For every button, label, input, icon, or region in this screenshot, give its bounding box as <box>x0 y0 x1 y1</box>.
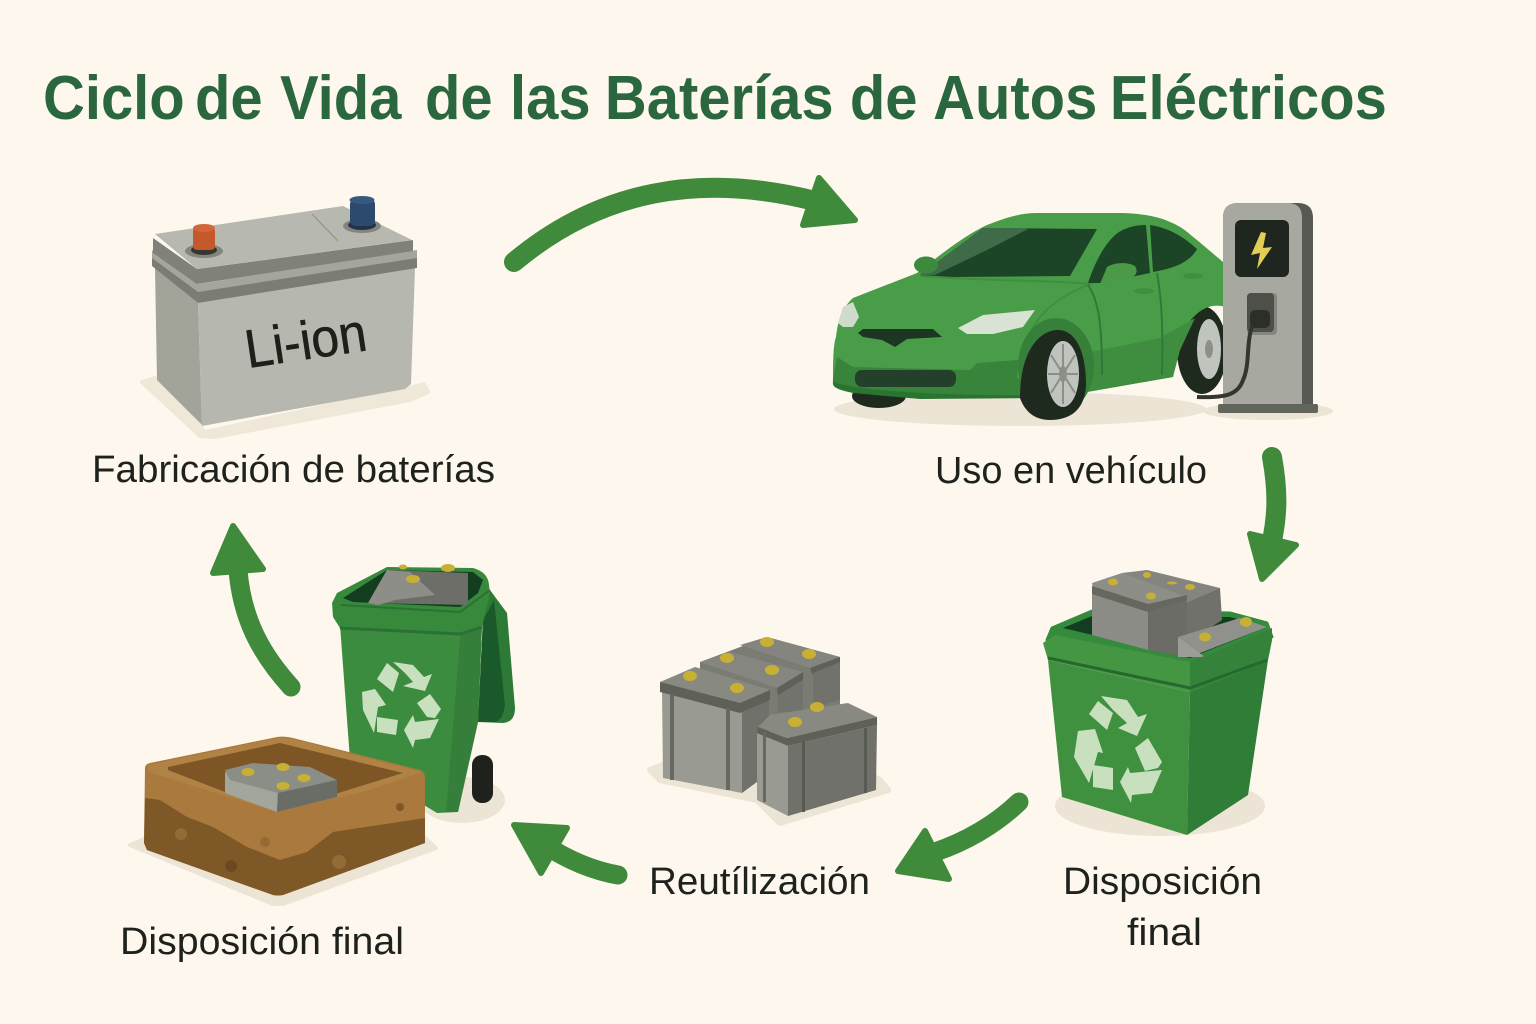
wheel <box>472 755 493 803</box>
middle battery <box>700 652 803 688</box>
bin opening <box>1063 616 1267 658</box>
title: de <box>425 63 509 132</box>
icon: stack of reused batteries <box>650 637 888 823</box>
title: de <box>850 63 934 132</box>
car: door lines <box>1088 285 1102 375</box>
bin rim back <box>1047 611 1272 665</box>
title: Vida <box>280 63 417 132</box>
soil front wall <box>145 771 425 880</box>
battery terminals <box>683 637 824 727</box>
car: lower front bumper <box>833 357 1040 398</box>
soil pit <box>168 743 403 812</box>
batteries inside <box>368 570 468 605</box>
icon: soil landfill box with battery <box>130 737 436 904</box>
car: front wheel arch and tyre <box>1018 318 1094 414</box>
title: Autos <box>933 63 1113 132</box>
batteries inside bin <box>1092 570 1267 657</box>
icon: Li-ion battery <box>142 196 428 437</box>
car: front intake <box>855 370 956 387</box>
label: final disposal right <box>1063 861 1262 954</box>
label: final disposal left: Disposición final <box>120 921 404 963</box>
buried battery <box>225 772 278 812</box>
bin body <box>1048 660 1190 835</box>
charging station <box>1197 203 1318 413</box>
recycling symbol <box>1074 696 1162 803</box>
car: windshield <box>920 228 1097 277</box>
label: reuse: Reutílización <box>649 861 870 903</box>
title: de <box>195 63 279 132</box>
front right battery <box>757 733 788 816</box>
title: las <box>510 63 607 132</box>
recycling symbol <box>362 662 441 748</box>
bin rim <box>332 567 490 634</box>
arrow: vehicle to recycling bin <box>1250 457 1296 579</box>
front left battery <box>662 692 742 793</box>
battery backing <box>700 637 840 725</box>
back battery <box>740 637 840 668</box>
label: manufacturing: Fabricación de baterías <box>92 449 495 491</box>
label: final disposal right: final <box>1127 912 1202 954</box>
arrow: manufacturing to vehicle <box>514 178 855 262</box>
car: headlights <box>958 310 1035 334</box>
icon: green bin with batteries <box>1043 570 1272 836</box>
car: body <box>833 213 1225 398</box>
arrow: recycling bin to reuse <box>898 802 1019 879</box>
arrow: final disposal to manufacturing <box>213 526 291 687</box>
arrow: reuse to final disposal <box>514 825 618 875</box>
battery label: Li-ion <box>241 302 370 380</box>
title: Baterías <box>605 63 850 132</box>
icon: green wheeled bin <box>332 564 515 823</box>
bin body <box>340 625 482 813</box>
car: lower door shading <box>1087 318 1195 392</box>
open lid <box>478 590 515 723</box>
car: side windows <box>1088 225 1150 283</box>
car: mirror <box>914 256 938 274</box>
label: final disposal right: Disposición <box>1063 861 1262 903</box>
soil rim top <box>148 738 422 822</box>
title: Eléctricos <box>1110 63 1387 132</box>
label: vehicle use: Uso en vehículo <box>935 450 1207 492</box>
icon: electric car at charging station <box>833 203 1333 426</box>
car: hood crease <box>920 276 1090 360</box>
title: Ciclo <box>43 63 201 132</box>
car: grille <box>858 329 942 347</box>
car: far tyres <box>852 384 906 408</box>
